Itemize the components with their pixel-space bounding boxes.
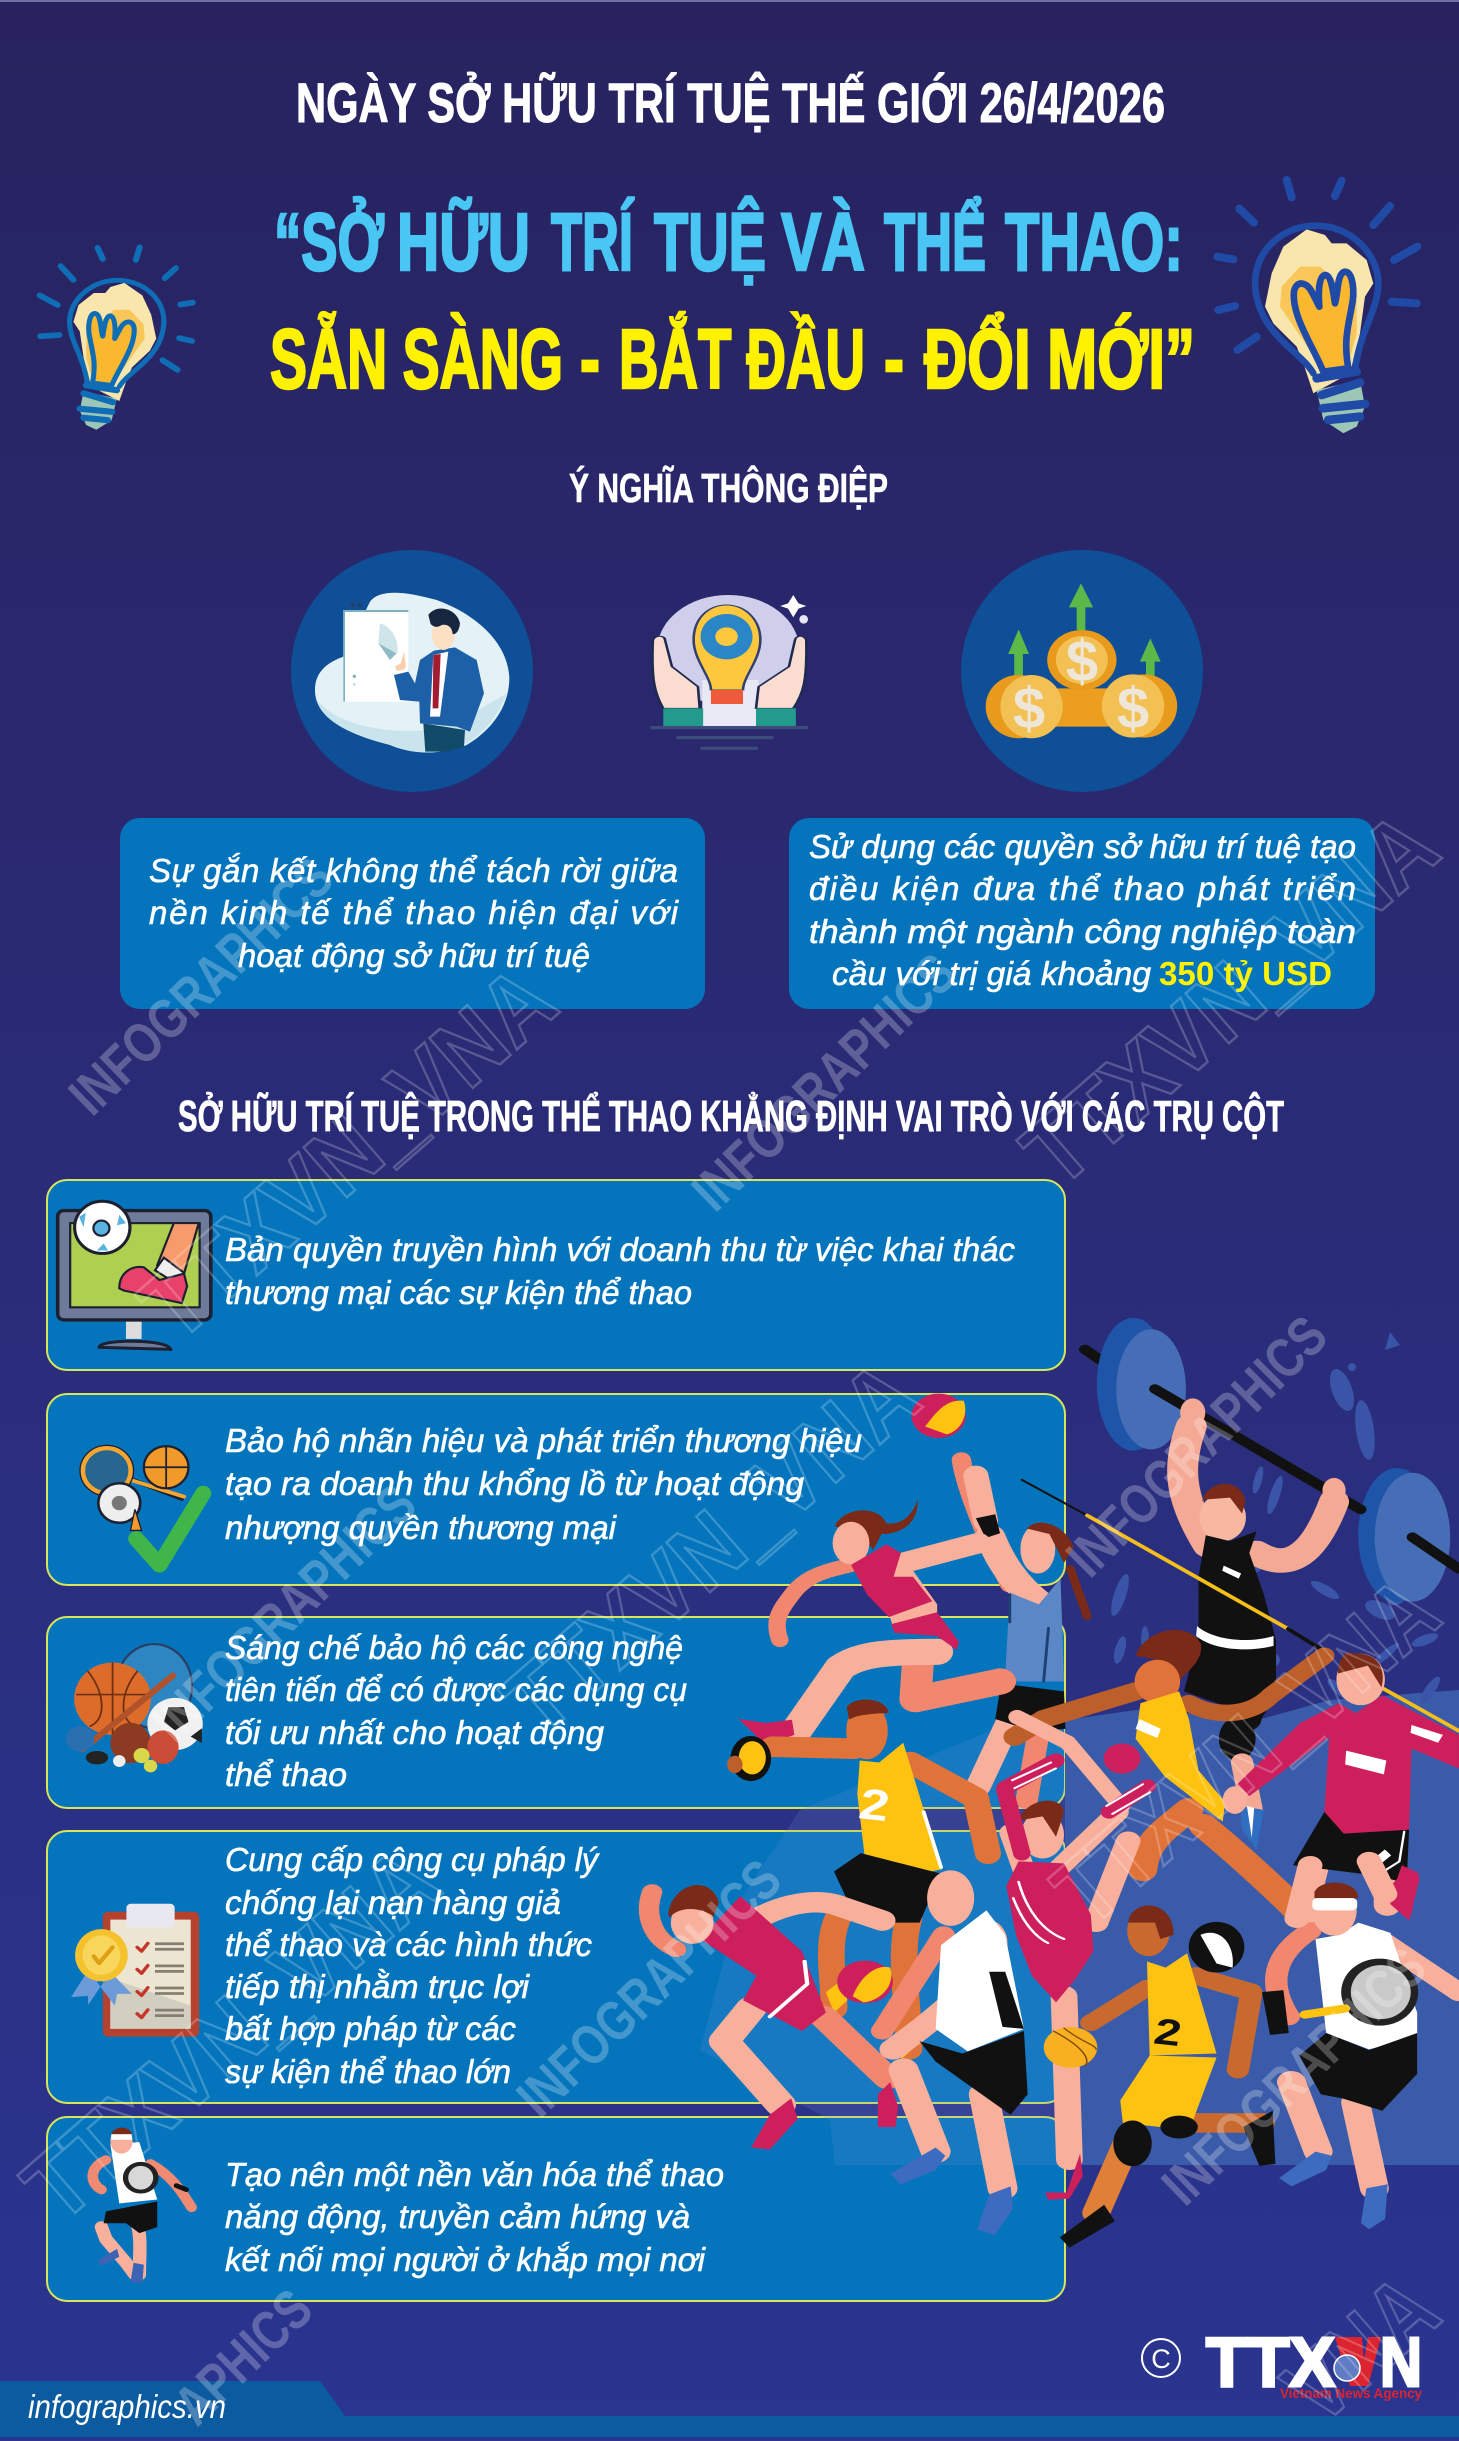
watermarks: TTXVN_VNA xyxy=(484,1341,939,1756)
heading: meaning of the message: Ý NGHĨA THÔNG ĐIỆP xyxy=(569,465,888,511)
watermarks: INFOGRAPHICS xyxy=(57,845,345,1127)
illustration: discus thrower xyxy=(727,1700,988,1875)
icon: tennis player xyxy=(93,2128,192,2283)
icon: hands holding light bulb with gear xyxy=(650,595,808,750)
icon: rising gold coins in circle xyxy=(961,550,1203,792)
icon: rising gold coins in circle: $ xyxy=(1117,676,1149,741)
watermarks: INFOGRAPHICS xyxy=(680,941,968,1223)
panel: global industry value: điều kiện đưa thể thao phát triển xyxy=(809,870,1356,907)
illustration: volleyball player xyxy=(912,1394,1087,1800)
athletes illustration background xyxy=(700,1332,1459,2165)
title: theme line 2: BẮT ĐẦU xyxy=(619,312,865,406)
website label: infographics.vn xyxy=(28,2388,226,2425)
icon: right light bulb xyxy=(1217,180,1417,433)
panel: sports economy and IP: nền kinh tế thể thao hiện đại với xyxy=(149,894,680,931)
watermarks: INFOGRAPHICS xyxy=(140,1472,428,1754)
logo: copyright and TTXVN: N xyxy=(1380,2323,1422,2401)
illustration: gymnast xyxy=(1006,1801,1128,2200)
illustration: goalkeeper xyxy=(1223,1652,1459,1917)
title: theme line 1: HỮU xyxy=(397,197,530,288)
title: event date: NGÀY SỞ HỮU TRÍ TUỆ THẾ GIỚI 26/4/2026 xyxy=(296,71,1165,134)
illustration: hurdler xyxy=(739,1500,1000,1745)
panel: global industry value xyxy=(789,818,1375,1009)
panel: global industry value: thành một ngành công nghiệp toàn xyxy=(809,913,1356,950)
panel: trademark protection: tạo ra doanh thu khổng lồ từ hoạt động xyxy=(225,1465,805,1502)
illustration: discus thrower shorts and legs xyxy=(826,1853,941,2060)
panel: patents: tối ưu nhất cho hoạt động xyxy=(225,1714,605,1751)
illustration: sprinter xyxy=(649,1885,898,2150)
panel: patents: tiên tiến để có được các dụng cụ xyxy=(225,1671,687,1708)
logo: copyright and TTXVN: Vietnam News Agency xyxy=(1280,2385,1422,2401)
panel: sports culture: kết nối mọi người ở khắp mọi nơi xyxy=(225,2241,707,2278)
title: theme line 1: TUỆ xyxy=(654,197,766,288)
icon: clipboard checklist with medal xyxy=(71,1904,199,2037)
title: theme line 1: THAO: xyxy=(1005,197,1183,288)
panel: patents xyxy=(47,1617,1065,1808)
panel: anti-counterfeiting: tiếp thị nhằm trục lợi xyxy=(225,1968,531,2005)
panel: sports culture: năng động, truyền cảm hứng và xyxy=(225,2198,690,2235)
logo: copyright and TTXVN: TTX xyxy=(1206,2323,1335,2401)
panel: broadcast rights: thương mại các sự kiện thể thao xyxy=(225,1274,692,1311)
icon: monitor with football xyxy=(58,1201,211,1349)
panel: sports economy and IP xyxy=(120,818,705,1009)
panel: sports culture: Tạo nên một nền văn hóa thể thao xyxy=(225,2156,724,2193)
panel: anti-counterfeiting: chống lại nạn hàng giả xyxy=(225,1884,561,1921)
panel: sports economy and IP: hoạt động sở hữu trí tuệ xyxy=(238,937,590,974)
title: theme line 1 xyxy=(274,197,1183,288)
title: theme line 2: - xyxy=(884,312,904,406)
panel: sports culture xyxy=(47,2117,1065,2301)
icon: presenter in circle xyxy=(291,550,533,792)
panel: global industry value: Sử dụng các quyền sở hữu trí tuệ tạo xyxy=(809,828,1356,865)
title: theme line 2: ĐỔI MỚI” xyxy=(924,312,1195,406)
illustration: javelin thrower xyxy=(1015,1630,1324,1911)
watermarks: INFOGRAPHICS xyxy=(1054,1304,1339,1588)
bottom band xyxy=(0,2381,1459,2437)
title: theme line 2: - xyxy=(580,312,600,406)
illustration: javelin xyxy=(1022,1480,1459,1731)
watermarks: APHICS xyxy=(162,2277,324,2437)
panel: trademark protection xyxy=(47,1394,1065,1585)
panel: patents: Sáng chế bảo hộ các công nghệ xyxy=(225,1629,683,1666)
panel: trademark protection: nhượng quyền thương mại xyxy=(225,1509,618,1546)
icon: pile of sports balls xyxy=(66,1644,203,1772)
logo: copyright and TTXVN xyxy=(1142,2323,1422,2401)
icon: rising gold coins in circle: $ xyxy=(1066,629,1098,694)
icon: left light bulb xyxy=(40,247,193,430)
panel: global industry value: 350 tỷ USD xyxy=(1159,955,1332,992)
watermarks: INFOGRAPHICS xyxy=(505,1847,793,2129)
illustration: arm stripes of the gymnast xyxy=(1005,1717,1150,1853)
panel: anti-counterfeiting: Cung cấp công cụ pháp lý xyxy=(225,1841,600,1878)
title: theme line 2: SẴN SÀNG xyxy=(270,312,563,406)
icon: rising gold coins in circle: $ xyxy=(1013,676,1045,741)
icon: sports gear with check mark xyxy=(80,1445,203,1565)
illustration: discus thrower: 2 xyxy=(856,1780,893,1831)
watermarks xyxy=(4,792,1458,2441)
panel: broadcast rights: Bản quyền truyền hình với doanh thu từ việc khai thác xyxy=(225,1231,1015,1268)
title: theme line 1: “SỞ xyxy=(274,197,384,288)
panel: trademark protection: Bảo hộ nhãn hiệu và phát triển thương hiệu xyxy=(225,1422,862,1459)
panel: anti-counterfeiting: thể thao và các hình thức xyxy=(225,1926,592,1963)
panel: anti-counterfeiting: bất hợp pháp từ các xyxy=(225,2010,516,2047)
logo: copyright and TTXVN: C xyxy=(1151,2344,1171,2374)
illustration: basketball player xyxy=(1044,1905,1275,2248)
panel: patents: thể thao xyxy=(225,1756,347,1793)
panel: anti-counterfeiting xyxy=(47,1831,1065,2103)
watermarks: TTXVN_VNA xyxy=(4,1827,459,2242)
panel: sports economy and IP: Sự gắn kết không thể tách rời giữa xyxy=(149,852,678,889)
panel: anti-counterfeiting: sự kiện thể thao lớn xyxy=(225,2053,511,2090)
watermarks: TTXVN_VNA xyxy=(121,946,576,1361)
illustration: player in white tank xyxy=(882,1870,1028,2235)
illustration: tennis player xyxy=(1262,1861,1459,2229)
illustration: weightlifter with barbell xyxy=(1085,1318,1459,1849)
title: theme line 2 xyxy=(270,312,1195,406)
title: theme line 1: THỂ xyxy=(884,197,986,288)
title: theme line 1: TRÍ xyxy=(551,197,634,288)
panel: global industry value: cầu với trị giá khoảng xyxy=(832,955,1152,992)
title: theme line 1: VÀ xyxy=(781,197,865,288)
panel: broadcast rights xyxy=(47,1180,1065,1370)
illustration: basketball player: 2 xyxy=(1151,2011,1185,2055)
